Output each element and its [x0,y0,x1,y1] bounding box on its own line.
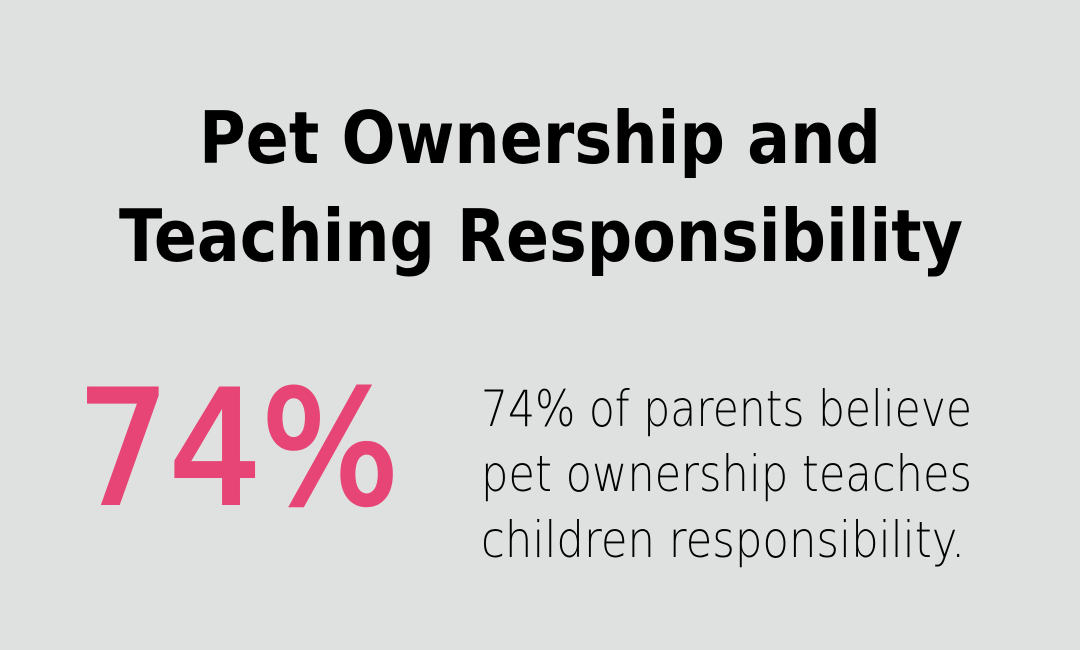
description text: pet ownership teaches [481,445,972,503]
description text: children responsibility. [481,511,965,569]
description text: 74% of parents believe [481,380,972,438]
description text [481,380,972,569]
title [119,96,963,278]
statistic: 74%: 74% [77,358,399,541]
title: Teaching Responsibility [119,194,963,278]
title: Pet Ownership and [199,96,881,180]
